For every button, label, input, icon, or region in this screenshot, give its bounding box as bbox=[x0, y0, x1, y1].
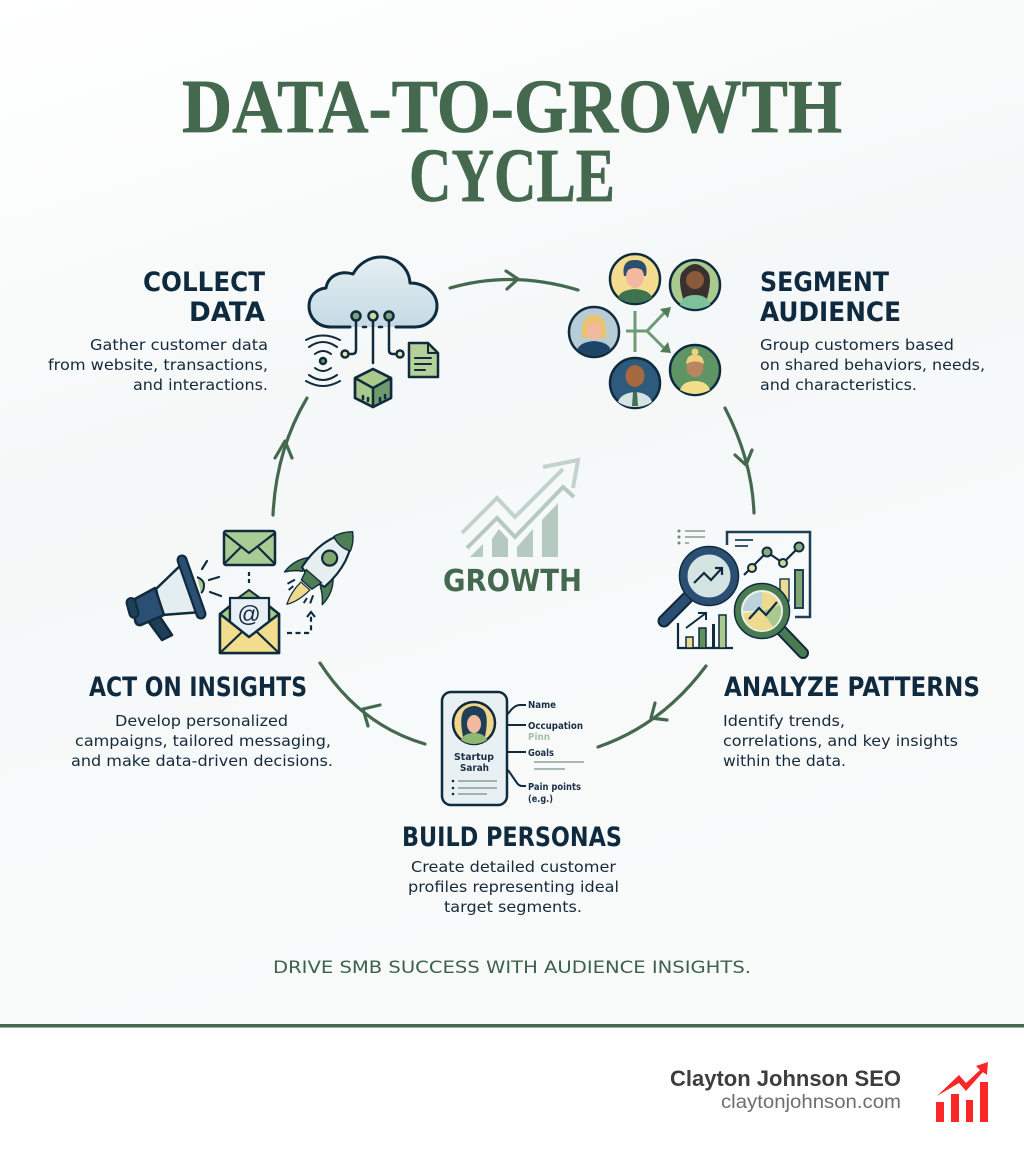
text: build personas: Create detailed customer bbox=[411, 858, 617, 876]
text: analyze patterns: Identify trends, bbox=[723, 712, 845, 730]
text: segment audience: on shared behaviors, needs, bbox=[760, 356, 985, 374]
icon: persona card: Startup bbox=[454, 752, 494, 763]
text: act on insights: and make data-driven decisions. bbox=[71, 752, 333, 770]
text: act on insights: campaigns, tailored messaging, bbox=[75, 732, 331, 750]
icon: persona card: Goals bbox=[528, 748, 554, 759]
text: collect data bbox=[48, 336, 268, 394]
icon: campaign megaphone, mail and rocket bbox=[126, 515, 372, 653]
brand url: claytonjohnson.com bbox=[721, 1092, 901, 1113]
growth label: GROWTH bbox=[443, 564, 582, 599]
cycle arrows bbox=[273, 271, 754, 747]
heading: collect data: COLLECT bbox=[143, 267, 266, 298]
heading: collect data: DATA bbox=[189, 297, 265, 328]
text: build personas: profiles representing ideal bbox=[408, 878, 619, 896]
sub-icon: open email: @ bbox=[237, 601, 261, 627]
text: segment audience: Group customers based bbox=[760, 336, 954, 354]
icon: red logo bbox=[936, 1062, 988, 1122]
icon: audience segments bbox=[569, 254, 720, 408]
title: CYCLE bbox=[409, 134, 615, 218]
icon: persona card: Name bbox=[528, 700, 556, 711]
text: analyze patterns: within the data. bbox=[723, 752, 846, 770]
icon: persona card bbox=[442, 692, 584, 805]
sub-icon: open email bbox=[220, 590, 279, 653]
icon: persona card: Occupation bbox=[528, 721, 583, 732]
icon: cloud data collection bbox=[306, 257, 438, 407]
heading: segment audience bbox=[760, 267, 901, 328]
icon: growth arrow bbox=[462, 460, 578, 557]
heading: analyze patterns: ANALYZE PATTERNS bbox=[724, 672, 980, 703]
heading: build personas: BUILD PERSONAS bbox=[402, 822, 622, 853]
heading: segment audience: SEGMENT bbox=[760, 267, 890, 298]
title bbox=[182, 65, 842, 218]
icon: analysis charts bbox=[664, 530, 810, 653]
sub-icon: envelope bbox=[224, 531, 275, 565]
heading: act on insights: ACT ON INSIGHTS bbox=[89, 672, 307, 703]
text: act on insights: Develop personalized bbox=[115, 712, 288, 730]
sub-icon: megaphone bbox=[126, 560, 221, 640]
heading: segment audience: AUDIENCE bbox=[760, 297, 901, 328]
text: analyze patterns bbox=[723, 712, 958, 770]
text: collect data: and interactions. bbox=[133, 376, 268, 394]
tagline: DRIVE SMB SUCCESS WITH AUDIENCE INSIGHTS. bbox=[273, 958, 751, 978]
text: collect data: Gather customer data bbox=[90, 336, 268, 354]
footer band bbox=[0, 1024, 1024, 1154]
icon: persona card: Pinn bbox=[528, 732, 550, 743]
text: collect data: from website, transactions, bbox=[48, 356, 268, 374]
text: analyze patterns: correlations, and key insights bbox=[723, 732, 958, 750]
sub-icon: rocket bbox=[269, 515, 372, 622]
title: DATA-TO-GROWTH bbox=[182, 65, 842, 149]
icon: persona card: (e.g.) bbox=[528, 794, 553, 805]
icon: persona card: Sarah bbox=[460, 763, 489, 774]
heading: collect data bbox=[143, 267, 266, 328]
text: act on insights bbox=[71, 712, 333, 770]
text: segment audience bbox=[760, 336, 985, 394]
text: build personas: target segments. bbox=[444, 898, 582, 916]
text: segment audience: and characteristics. bbox=[760, 376, 917, 394]
brand name: Clayton Johnson SEO bbox=[670, 1066, 901, 1091]
icon: persona card: Pain points bbox=[528, 782, 581, 793]
text: build personas bbox=[408, 858, 619, 916]
